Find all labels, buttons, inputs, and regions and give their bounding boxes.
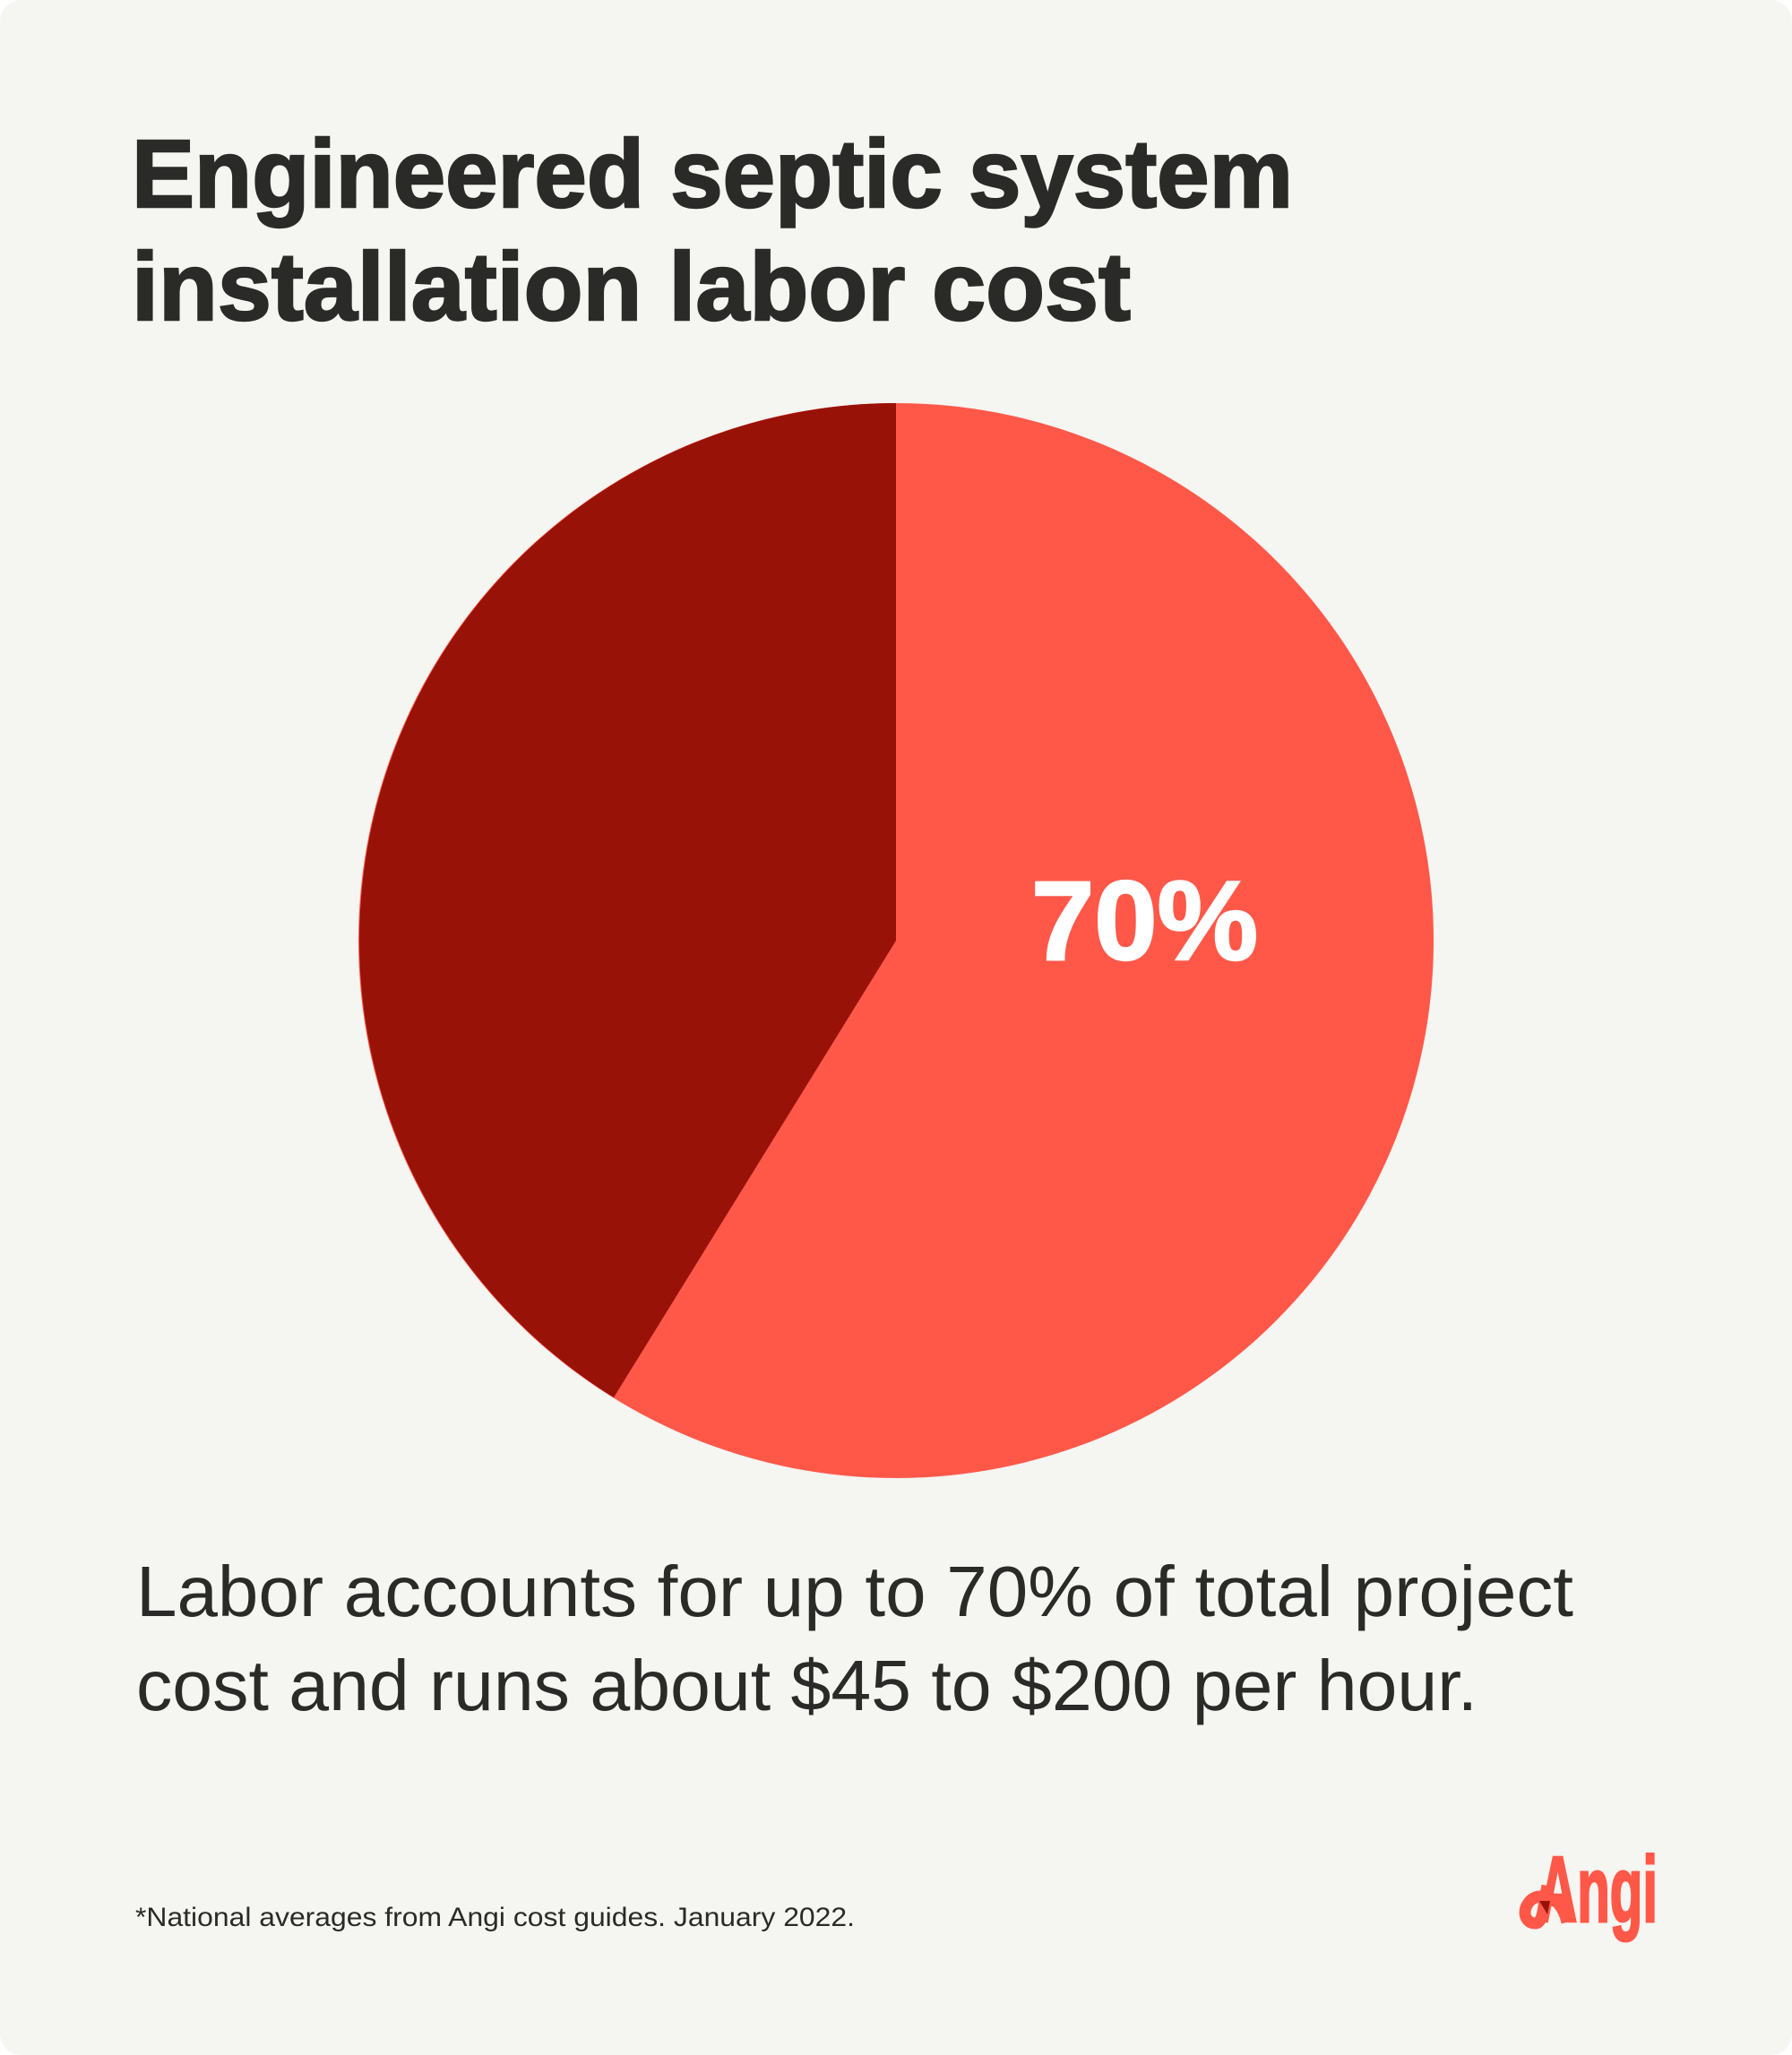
body text — [136, 1552, 1573, 1725]
body text: cost and runs about $45 to $200 per hour. — [136, 1646, 1478, 1725]
logo fold shadow — [1539, 1901, 1550, 1914]
title: installation labor cost — [132, 232, 1131, 340]
title: Engineered septic system — [132, 119, 1293, 228]
pie slice: remainder — [358, 403, 1434, 1478]
footnote: *National averages from Angi cost guides. January 2022. — [135, 1903, 855, 1932]
logo loop — [1525, 1886, 1567, 1923]
logo wordmark: Angi — [1538, 1838, 1658, 1942]
title — [132, 119, 1293, 340]
logo: Angi — [1525, 1838, 1658, 1942]
pie label: 70%: 70% — [1031, 859, 1258, 984]
pie chart — [358, 403, 1434, 1478]
body text: Labor accounts for up to 70% of total project — [136, 1552, 1573, 1631]
pie slice: dark — [359, 403, 896, 1397]
